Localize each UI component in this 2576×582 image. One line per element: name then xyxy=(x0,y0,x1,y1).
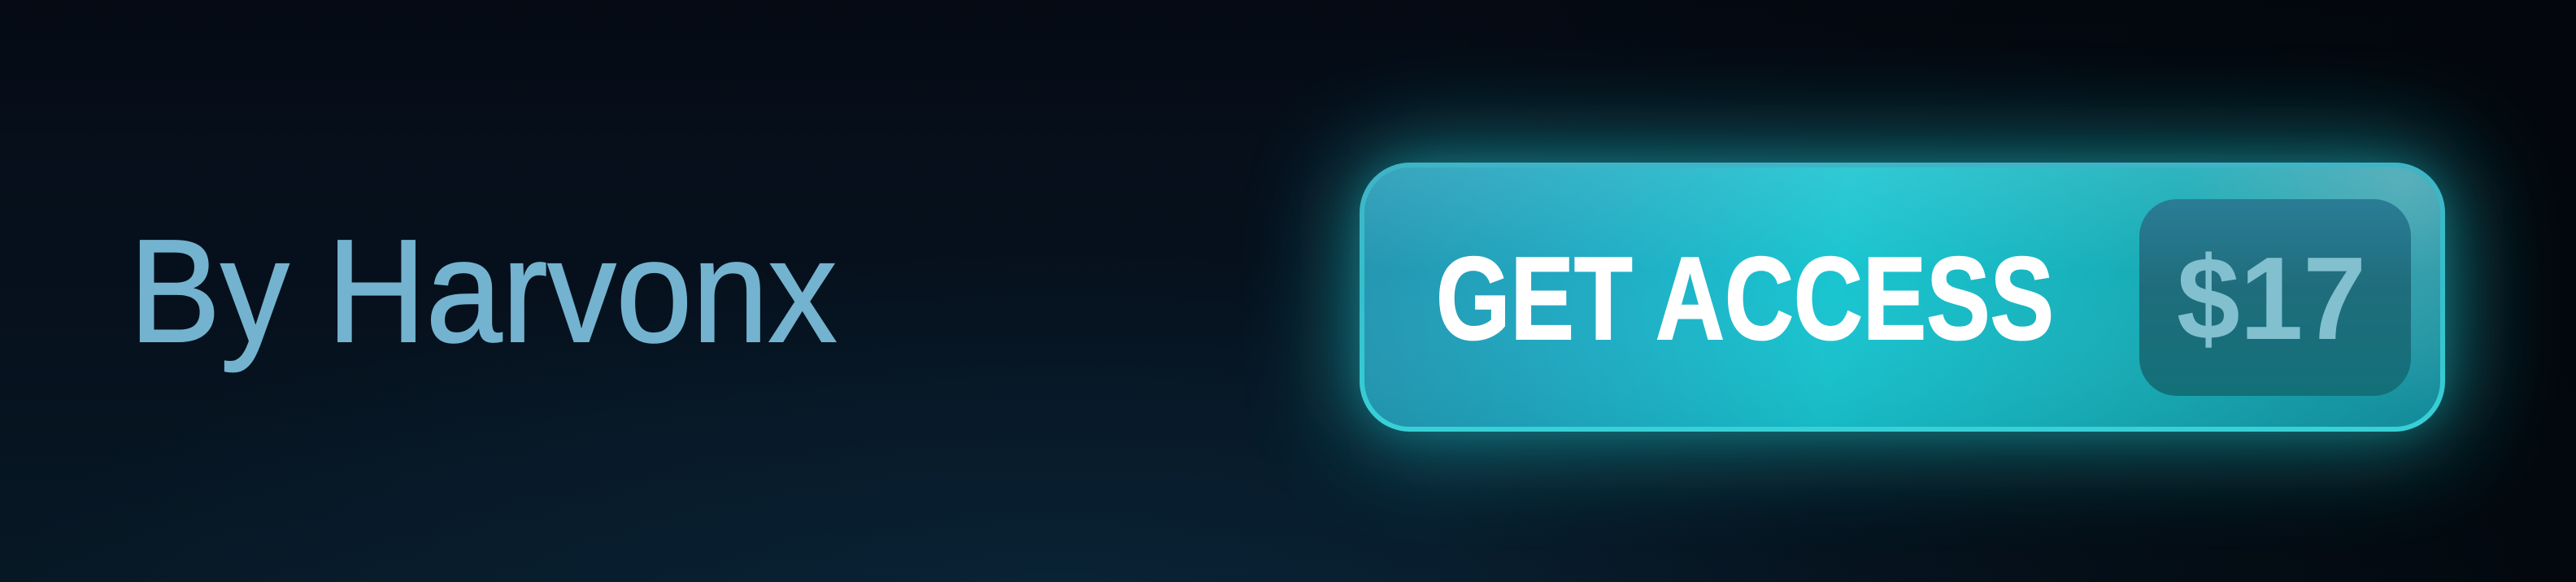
call to action button xyxy=(1350,154,2456,440)
price badge xyxy=(2139,199,2411,396)
button glow xyxy=(1350,154,2456,440)
button body xyxy=(1362,165,2443,429)
price: $17 xyxy=(2177,232,2366,364)
author byline: By Harvonx xyxy=(129,210,837,373)
button label: GET ACCESS xyxy=(1436,232,2054,364)
